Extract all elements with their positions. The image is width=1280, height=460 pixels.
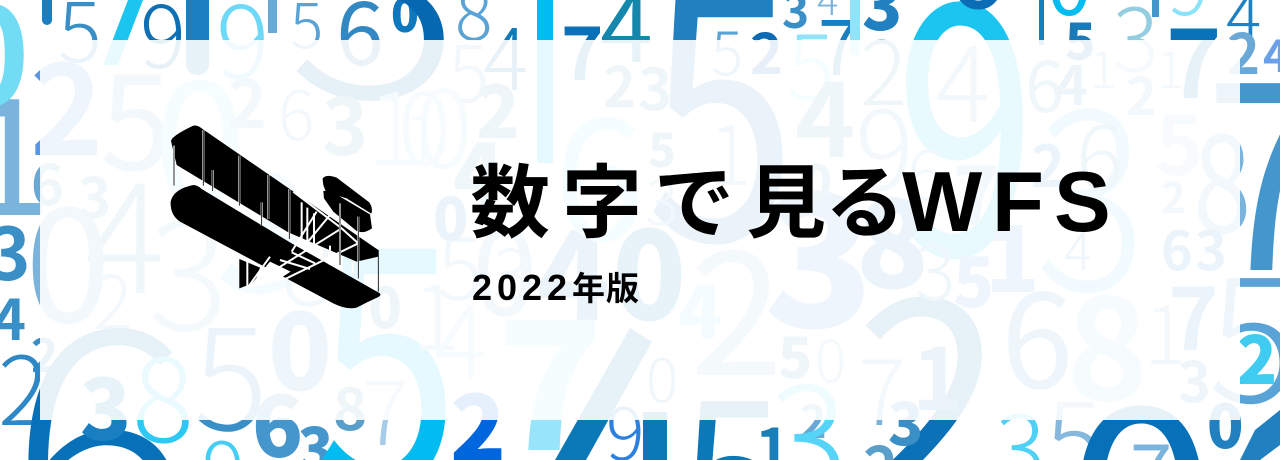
background: scattered digits: 6 (553, 49, 645, 288)
background: scattered digits: 7 (858, 321, 906, 451)
background: scattered digits: 1 (1144, 272, 1187, 388)
background: scattered digits: 2 (603, 43, 636, 124)
background: scattered digits: 6 (907, 121, 943, 220)
background: scattered digits: 1 (985, 188, 1040, 318)
background: scattered digits: 0 (433, 173, 468, 257)
background: scattered digits: 6 (1001, 238, 1073, 426)
background: scattered digits: 3 (888, 378, 923, 460)
background: scattered digits: 2 (1161, 165, 1186, 226)
background: scattered digits: 7 (953, 133, 1000, 249)
background: scattered digits: 3 (322, 66, 368, 178)
background: scattered digits: 4 (935, 1, 991, 152)
background: scattered digits: 2 (1237, 308, 1277, 404)
background: scattered digits: 3 (148, 157, 228, 374)
lower wing (171, 185, 380, 308)
background: scattered digits: 2 (228, 52, 267, 148)
background: scattered digits: 4 (434, 262, 488, 407)
background: scattered digits: 8 (1066, 239, 1149, 441)
background: scattered digits: 8 (282, 189, 336, 334)
background: scattered digits: 3 (493, 220, 530, 321)
background: scattered digits: 7 (1168, 250, 1219, 375)
background: scattered digits: 2 (30, 11, 103, 191)
background: scattered digits: 0 (815, 315, 846, 399)
struts and truss (174, 130, 358, 287)
white veil fading the central digits (40, 40, 1240, 420)
rudder blades (323, 176, 372, 232)
background: scattered digits: 6 (278, 61, 314, 160)
background: scattered digits: 5 (448, 13, 490, 125)
background: scattered digits: 3 (78, 154, 111, 235)
subtitle: 2022 (472, 267, 567, 308)
upper wing (171, 126, 378, 262)
background: scattered digits: 1 (912, 310, 963, 435)
background: scattered digits: 5 (1155, 80, 1203, 199)
background: scattered digits: 1 (367, 49, 420, 194)
background: scattered digits: 5 (1065, 3, 1095, 75)
background: scattered digits: 3 (1195, 207, 1227, 286)
background: scattered digits: 8 (1193, 78, 1251, 272)
background: scattered digits: 6 (1025, 32, 1064, 133)
background: scattered digits: 4 (85, 120, 165, 337)
background: scattered digits: 6 (1161, 207, 1193, 286)
background: scattered digits: 8 (333, 363, 367, 447)
background: scattered digits: 0 (25, 142, 111, 367)
forward block (239, 259, 260, 288)
background: scattered digits: 5 (648, 115, 676, 181)
background: scattered digits: 0 (153, 11, 246, 254)
background: scattered digits: 3 (638, 43, 672, 127)
title latin part: WFS (902, 155, 1111, 250)
background: scattered digits: 3 (1035, 7, 1146, 361)
background: scattered digits: 0 (368, 264, 402, 345)
background: scattered digits: 4 (453, 109, 504, 230)
background: scattered digits: 0 (268, 269, 332, 421)
background: scattered digits: 4 (1056, 42, 1088, 121)
background: scattered digits: 5 (437, 200, 483, 325)
background: scattered digits: 0 (415, 44, 473, 200)
background: scattered digits: 2 (1031, 120, 1065, 204)
background: scattered digits: 3 (764, 118, 874, 379)
background: scattered digits: 1 (1090, 31, 1117, 103)
title: 数字で見る (470, 139, 905, 255)
nose opening (251, 262, 291, 285)
background: scattered digits: 2 (800, 386, 827, 451)
subtitle: 年版 (572, 270, 639, 307)
background: scattered digits: 1 (412, 246, 460, 376)
background: scattered digits: 2 (1227, 10, 1260, 91)
background: scattered digits: 1 (708, 90, 752, 209)
background: scattered digits: 3 (915, 212, 956, 322)
background: scattered digits: 1 (403, 85, 440, 186)
background: scattered digits: 2 (690, 181, 783, 424)
background: scattered digits: 5 (100, 20, 172, 208)
background: scattered digits: 2 (31, 320, 58, 386)
background: scattered digits: 2 (750, 10, 783, 91)
background: scattered digits: 2 (860, 4, 907, 131)
background: scattered digits: 5 (711, 6, 743, 93)
background: scattered digits: 2 (1126, 55, 1157, 130)
background: scattered digits: 1 (1157, 31, 1184, 103)
background: scattered digits: 4 (795, 40, 855, 187)
background: scattered digits: 4 (537, 181, 610, 355)
background: scattered digits: 6 (31, 141, 64, 222)
background: scattered digits: 0 (612, 179, 686, 356)
background: scattered digits: 3 (645, 153, 678, 243)
background: scattered digits: 4 (678, 254, 722, 359)
background: scattered digits: 6 (1076, 89, 1123, 216)
background: scattered digits: 5 (778, 314, 812, 395)
background: scattered digits: 2 (476, 54, 520, 159)
background: scattered digits: 0 (803, 144, 832, 214)
background: scattered digits: 3 (1178, 338, 1211, 419)
background: scattered digits: 0 (398, 49, 452, 194)
background: scattered digits: 8 (856, 149, 929, 323)
background: scattered digits: 0 (472, 178, 538, 349)
background: scattered digits: 0 (646, 333, 678, 420)
background: scattered digits: 9 (855, 62, 914, 222)
background: scattered digits: 2 (93, 244, 133, 351)
background: scattered digits: 5 (953, 228, 994, 327)
background: scattered digits: 3 (216, 107, 310, 339)
background: scattered digits: 4 (1064, 210, 1092, 285)
icon: Wright Flyer biplane (171, 126, 380, 308)
